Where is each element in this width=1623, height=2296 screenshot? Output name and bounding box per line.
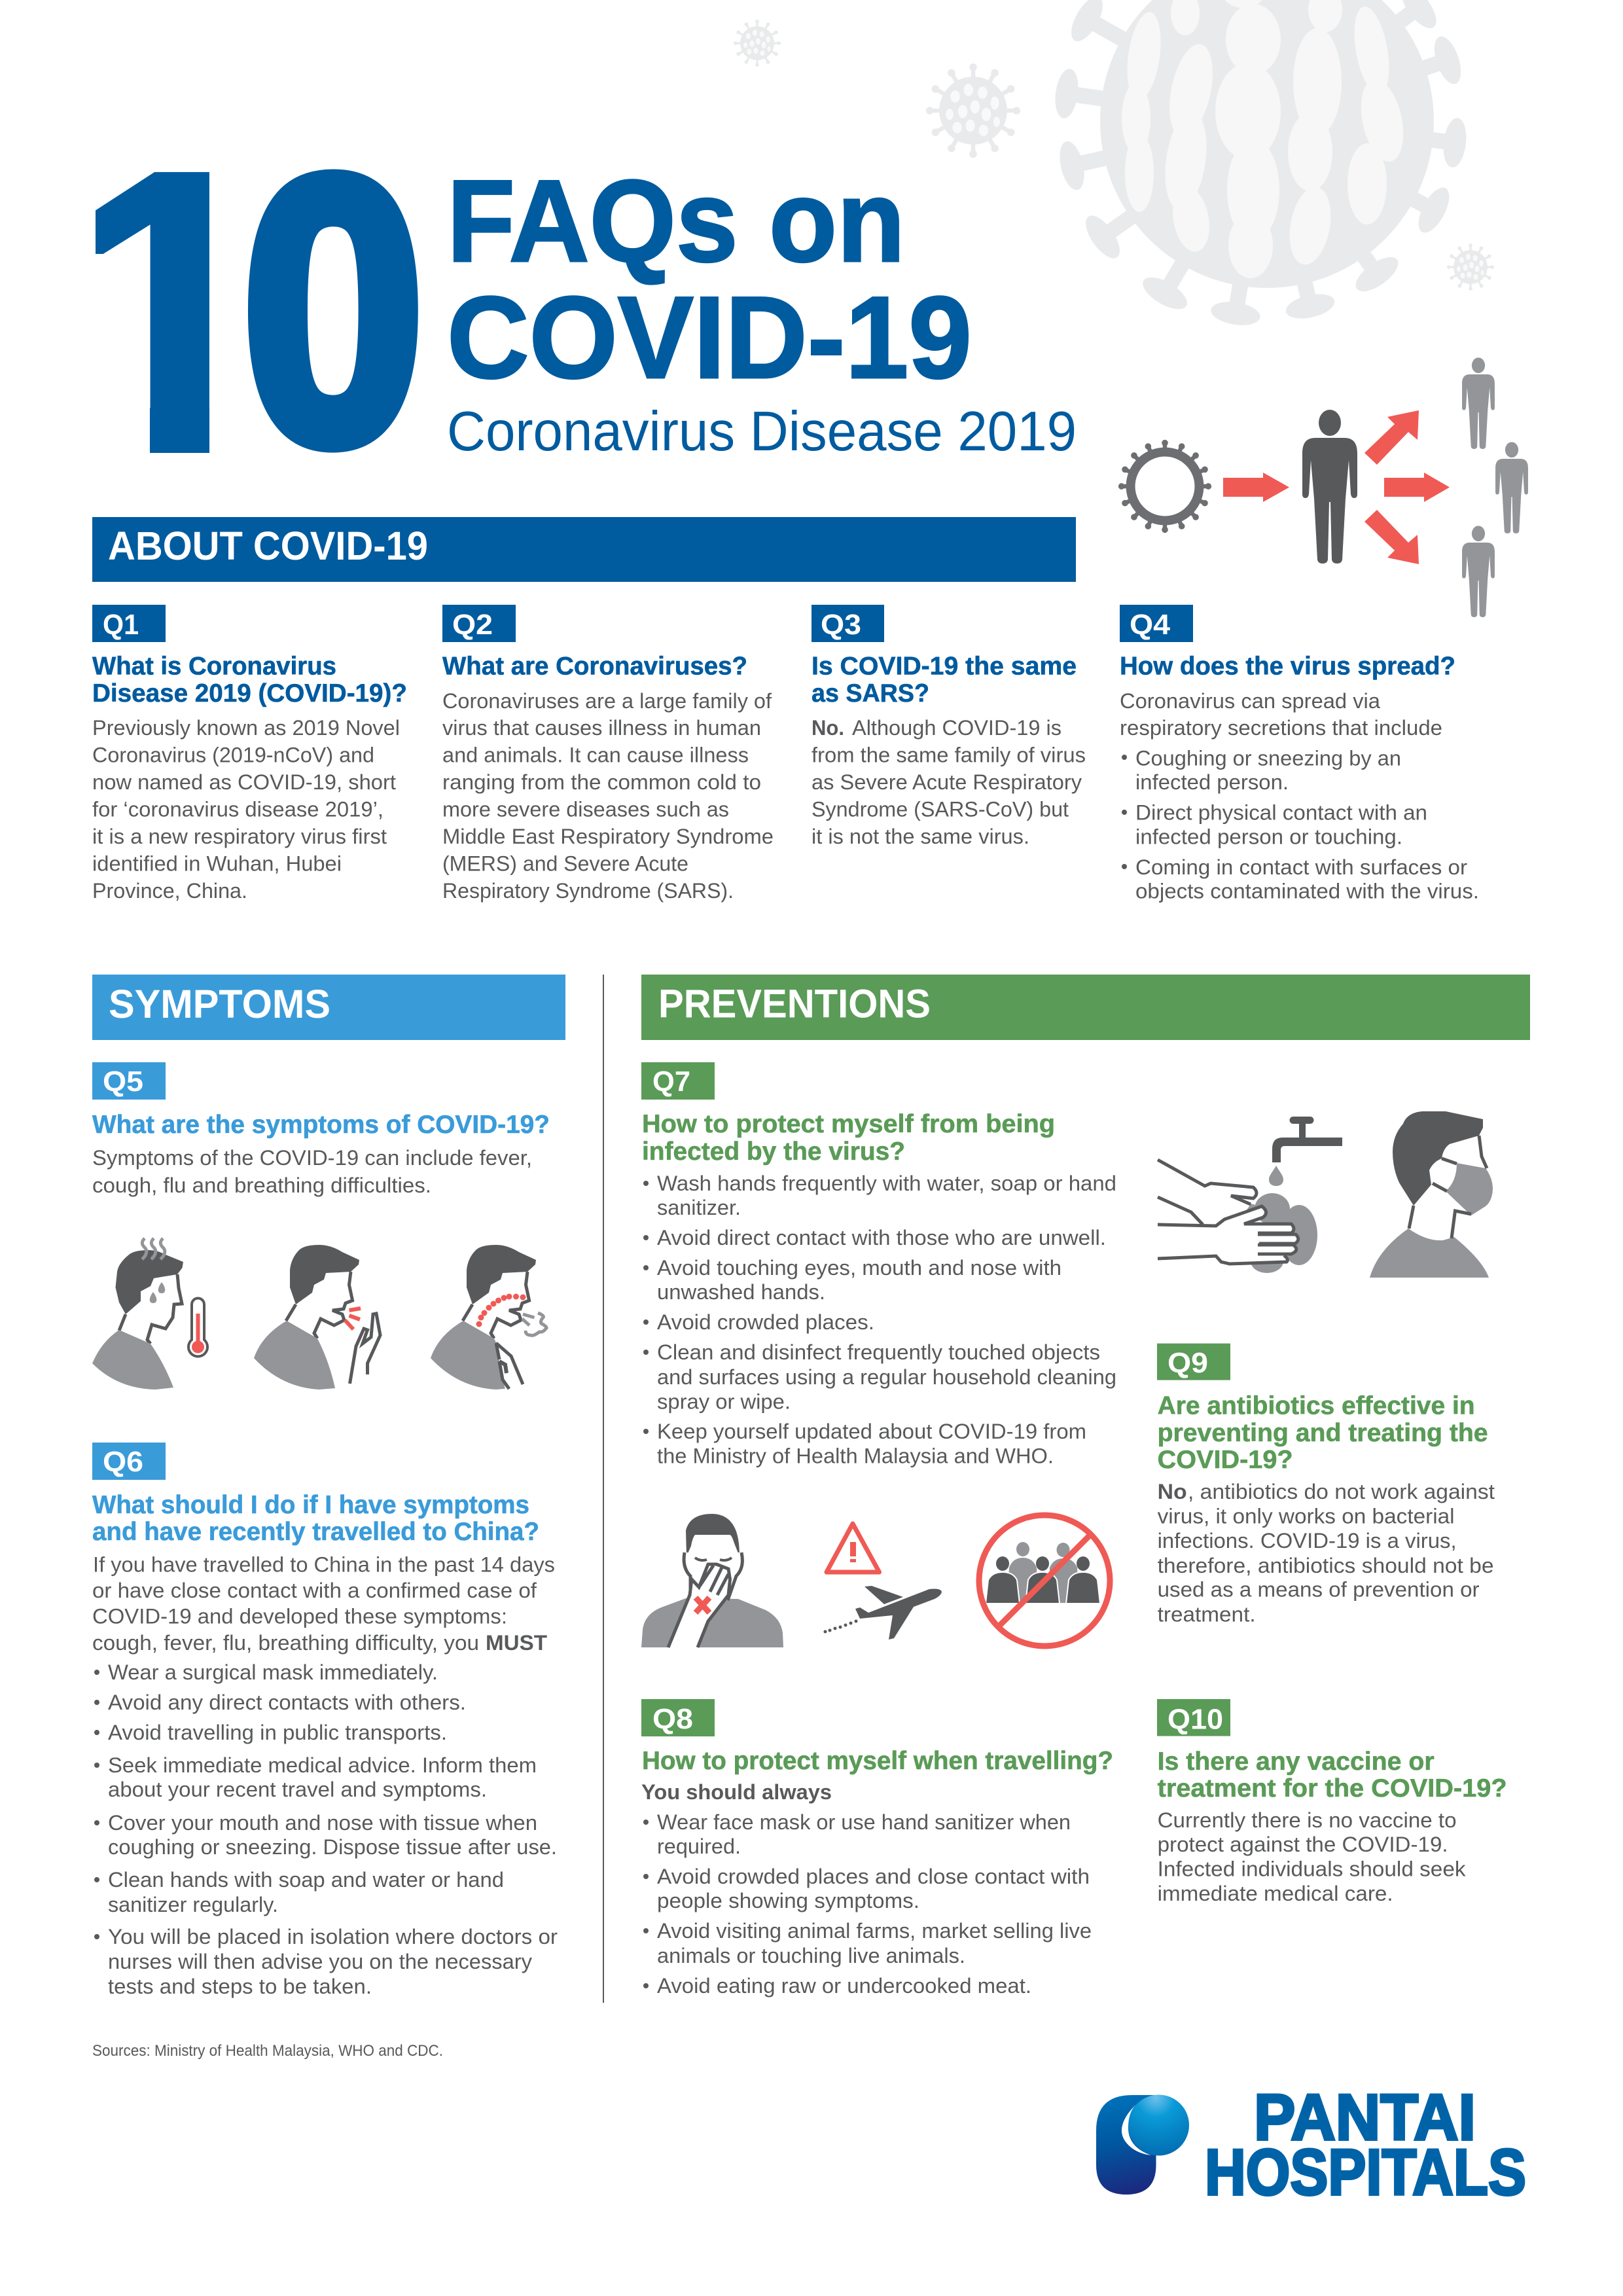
thermometer <box>188 1299 207 1356</box>
panel: Q9: infections. COVID-19 is a virus, <box>1158 1529 1457 1552</box>
panel: Q7: Q7 <box>652 1066 690 1098</box>
panel: Q1 <box>92 605 407 903</box>
icon: breathing difficulty <box>431 1245 546 1390</box>
panel: Q7: sanitizer. <box>657 1196 741 1219</box>
background virus, small right <box>1449 245 1492 289</box>
icon: person wearing mask <box>1370 1111 1493 1278</box>
panel: Q7: infected by the virus? <box>642 1138 905 1166</box>
title: 10: 1 <box>58 87 282 537</box>
panel: Q6: nurses will then advise you on the necessary <box>108 1950 533 1973</box>
banner: symptoms: SYMPTOMS <box>109 982 330 1026</box>
subtitle: Coronavirus Disease 2019 <box>447 401 1077 463</box>
banner: preventions: PREVENTIONS <box>658 982 931 1026</box>
arrow: up right <box>1364 410 1419 465</box>
sweat drops <box>158 1282 165 1293</box>
panel: Q3: Syndrome (SARS-CoV) but <box>812 797 1069 821</box>
panel: Q6: coughing or sneezing. Dispose tissue after use. <box>108 1835 557 1859</box>
banner: symptoms <box>92 975 565 1040</box>
arrow: right <box>1384 473 1450 502</box>
logo wordmark: HOSPITALS <box>1205 2136 1526 2208</box>
panel: Q8: You should always <box>641 1780 832 1804</box>
panel: Q7: spray or wipe. <box>657 1390 791 1414</box>
panel: Q2: Coronaviruses are a large family of <box>442 689 772 713</box>
panel: Q2: Q2 <box>452 609 493 641</box>
panel: Q1: it is a new respiratory virus first <box>92 825 387 848</box>
panel: Q6: and have recently travelled to China? <box>92 1518 539 1546</box>
sources note: Sources: Ministry of Health Malaysia, WHO and CDC. <box>92 2042 443 2060</box>
panel: Q6: sanitizer regularly. <box>108 1893 278 1916</box>
panel: Q9: COVID-19? <box>1158 1446 1293 1474</box>
panel: Q6 <box>92 1443 558 1998</box>
panel: Q6: about your recent travel and symptoms. <box>108 1778 487 1801</box>
panel: Q9: No <box>1158 1480 1187 1503</box>
panel: Q4: infected person or touching. <box>1135 825 1402 848</box>
panel: Q3: from the same family of virus <box>812 744 1086 767</box>
panel: Q3: Although COVID-19 is <box>852 716 1061 740</box>
panel: Q7 <box>641 1062 1116 1468</box>
panel: Q6: What should I do if I have symptoms <box>92 1491 529 1519</box>
panel: Q6: COVID-19 and developed these symptoms: <box>92 1605 507 1628</box>
arrow: down right <box>1364 510 1419 564</box>
panel: Q3: as Severe Acute Respiratory <box>812 770 1082 794</box>
panel: Q8: animals or touching live animals. <box>657 1944 965 1967</box>
panel: Q3 <box>812 605 1086 848</box>
panel: Q2: ranging from the common cold to <box>442 770 761 794</box>
logo: Pantai Hospitals <box>1096 2081 1526 2208</box>
panel: Q9: Are antibiotics effective in <box>1158 1391 1475 1420</box>
panel: Q10: treatment for the COVID-19? <box>1158 1774 1507 1803</box>
panel: Q2: virus that causes illness in human <box>442 716 761 740</box>
panel: Q6: Avoid any direct contacts with others. <box>108 1691 466 1714</box>
panel: Q7: and surfaces using a regular household cleaning <box>657 1365 1116 1389</box>
panel: Q5 <box>92 1062 550 1197</box>
logo wordmark <box>1205 2081 1526 2208</box>
icon: avoid crowds <box>979 1515 1110 1646</box>
panel: Q4: Coming in contact with surfaces or <box>1135 855 1467 879</box>
panel: Q7: Avoid touching eyes, mouth and nose with <box>657 1256 1061 1280</box>
icon: person top <box>1462 357 1495 449</box>
panel: Q6: You will be placed in isolation where doctors or <box>108 1925 558 1948</box>
panel: Q8: people showing symptoms. <box>657 1889 919 1912</box>
panel: Q3: No. <box>812 716 844 740</box>
panel: Q8: Q8 <box>652 1703 693 1735</box>
panel: Q9: used as a means of prevention or <box>1158 1577 1480 1601</box>
panel: Q4: Q4 <box>1130 609 1171 641</box>
panel: Q10 <box>1157 1699 1507 1905</box>
panel: Q4: How does the virus spread? <box>1120 652 1455 681</box>
panel: Q4: Coronavirus can spread via <box>1120 689 1381 713</box>
panel: Q4: Direct physical contact with an <box>1135 801 1427 825</box>
panel: Q8: Avoid visiting animal farms, market selling live <box>657 1919 1092 1943</box>
panel: Q4: objects contaminated with the virus. <box>1135 880 1479 903</box>
panel: Q7: How to protect myself from being <box>642 1110 1055 1138</box>
background virus, medium <box>930 67 1016 154</box>
panel: Q6: Clean hands with soap and water or hand <box>108 1868 504 1892</box>
panel: Q6: Wear a surgical mask immediately. <box>108 1660 438 1684</box>
panel: Q1: What is Coronavirus <box>92 652 336 681</box>
banner: preventions <box>641 975 1530 1040</box>
panel: Q7: Keep yourself updated about COVID-19 from <box>657 1420 1086 1443</box>
icon: virus spreading to people <box>1122 357 1528 617</box>
panel: Q10: Is there any vaccine or <box>1158 1748 1435 1776</box>
title: FAQs on COVID-19: COVID-19 <box>447 272 972 403</box>
panel: Q3: Q3 <box>821 609 861 641</box>
icon: handwashing <box>1158 1117 1342 1273</box>
panel: Q2: Middle East Respiratory Syndrome <box>442 825 774 848</box>
panel: Q8: Avoid crowded places and close contact with <box>657 1865 1090 1888</box>
icon: cover mouth when coughing <box>641 1514 783 1647</box>
panel: Q6: or have close contact with a confirmed case of <box>92 1579 537 1602</box>
icon: person middle <box>1495 442 1528 533</box>
panel: Q8: How to protect myself when travelling? <box>642 1747 1113 1775</box>
title: FAQs on COVID-19: FAQs on <box>447 156 905 286</box>
panel: Q1: Province, China. <box>92 879 247 903</box>
panel: Q6: Avoid travelling in public transports. <box>108 1721 447 1744</box>
panel: Q9: preventing and treating the <box>1158 1419 1488 1447</box>
panel: Q9: virus, it only works on bacterial <box>1158 1505 1455 1528</box>
heat lines <box>142 1238 165 1259</box>
icon: dark virus <box>1122 443 1208 529</box>
icon: infected person <box>1302 410 1357 564</box>
panel: Q6: Cover your mouth and nose with tissue when <box>108 1811 537 1835</box>
panel: Q8: Avoid eating raw or undercooked meat. <box>657 1974 1031 1998</box>
panel: Q10: protect against the COVID-19. <box>1158 1833 1448 1856</box>
panel: Q7: Wash hands frequently with water, soap or hand <box>657 1172 1116 1195</box>
panel: Q9: therefore, antibiotics should not be <box>1158 1554 1494 1577</box>
panel: Q1: Coronavirus (2019-nCoV) and <box>92 744 374 767</box>
panel: Q9: treatment. <box>1158 1602 1256 1626</box>
panel: Q7: the Ministry of Health Malaysia and WHO. <box>657 1444 1054 1468</box>
panel: Q6: cough, fever, flu, breathing difficulty, you <box>92 1631 479 1655</box>
panel: Q6: Q6 <box>103 1446 143 1478</box>
panel: Q7: unwashed hands. <box>657 1280 825 1304</box>
panel: Q4: Coughing or sneezing by an <box>1135 746 1401 770</box>
panel: Q6: MUST <box>486 1631 547 1655</box>
panel: Q2: Respiratory Syndrome (SARS). <box>442 879 734 903</box>
panel: Q1: Disease 2019 (COVID-19)? <box>92 679 407 708</box>
panel: Q7: Avoid direct contact with those who are unwell. <box>657 1226 1106 1249</box>
title: 10: 0 <box>242 99 424 520</box>
panel: Q10: Infected individuals should seek <box>1158 1857 1466 1881</box>
panel: Q6: tests and steps to be taken. <box>108 1975 372 1998</box>
panel: Q2: more severe diseases such as <box>442 797 729 821</box>
background virus, large <box>1052 0 1469 329</box>
panel: Q8: Wear face mask or use hand sanitizer when <box>657 1810 1071 1834</box>
panel: Q10: immediate medical care. <box>1158 1882 1393 1905</box>
panel: Q4: infected person. <box>1135 770 1289 794</box>
panel: Q3: Is COVID-19 the same <box>812 652 1077 681</box>
panel: Q2: What are Coronaviruses? <box>442 652 747 681</box>
panel: Q4: respiratory secretions that include <box>1120 716 1442 740</box>
panel: Q5: Symptoms of the COVID-19 can include fever, <box>92 1146 532 1170</box>
panel: Q9: , antibiotics do not work against <box>1188 1480 1495 1503</box>
panel: Q6: Seek immediate medical advice. Inform them <box>108 1753 537 1777</box>
title: 10 <box>96 169 418 453</box>
icon: fever <box>92 1238 207 1390</box>
panel: Q1: Previously known as 2019 Novel <box>92 716 400 740</box>
panel: Q3: as SARS? <box>812 679 929 708</box>
panel: Q7: Avoid crowded places. <box>657 1310 874 1334</box>
panel: Q2: and animals. It can cause illness <box>442 744 749 767</box>
panel: Q1: for ‘coronavirus disease 2019’, <box>92 797 383 821</box>
panel: Q10: Q10 <box>1168 1704 1223 1736</box>
panel: Q9 <box>1157 1344 1495 1626</box>
panel: Q2: (MERS) and Severe Acute <box>442 852 688 876</box>
arrow: virus to person <box>1223 473 1289 502</box>
panel: Q5: What are the symptoms of COVID-19? <box>92 1111 550 1139</box>
panel: Q5: cough, flu and breathing difficulties. <box>92 1174 431 1197</box>
panel: Q10: Currently there is no vaccine to <box>1158 1808 1457 1832</box>
banner: about covid-19: ABOUT COVID-19 <box>108 524 428 568</box>
panel: Q4 <box>1120 605 1479 903</box>
panel: Q1: identified in Wuhan, Hubei <box>92 852 342 876</box>
title: FAQs on COVID-19 <box>447 156 972 403</box>
icon: travel warning and plane <box>823 1524 942 1640</box>
panel: Q3: it is not the same virus. <box>812 825 1029 848</box>
panel: Q1: Q1 <box>103 609 139 641</box>
logo mark <box>1096 2094 1189 2195</box>
panel: Q7: Clean and disinfect frequently touched objects <box>657 1340 1100 1364</box>
panel: Q5: Q5 <box>103 1066 143 1098</box>
background virus, small top <box>736 22 779 65</box>
icon: person bottom <box>1462 526 1495 617</box>
logo wordmark: PANTAI <box>1254 2081 1476 2153</box>
panel: Q6: If you have travelled to China in the past 14 days <box>93 1552 555 1576</box>
panel: Q2 <box>442 605 774 903</box>
panel: Q8: required. <box>657 1835 741 1858</box>
panel: Q1: now named as COVID-19, short <box>92 770 396 794</box>
panel: Q9: Q9 <box>1168 1347 1208 1379</box>
panel: Q8 <box>641 1699 1113 1998</box>
icon: cough <box>254 1245 380 1390</box>
banner: about covid-19 <box>92 517 1076 582</box>
